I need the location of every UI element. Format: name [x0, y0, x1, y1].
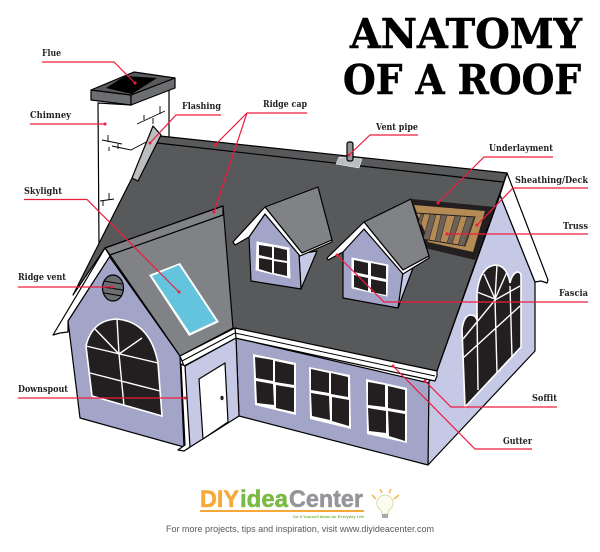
label: Flue [42, 49, 136, 84]
logo: idea [240, 486, 289, 513]
label: Soffit [424, 380, 558, 407]
front main wall [236, 338, 429, 465]
label: Gutter: Gutter [503, 437, 532, 447]
footer text: For more projects, tips and inspiration, visit www.diyideacenter.com [166, 524, 434, 535]
label: Ridge vent: Ridge vent [18, 273, 67, 283]
label: Ridge cap: Ridge cap [263, 100, 307, 110]
left bargeboard [53, 248, 110, 335]
roof opening: underlayment [412, 199, 495, 260]
label: Fascia [336, 254, 588, 302]
left gable wall [68, 256, 184, 447]
arched window right [462, 265, 521, 407]
logo: DIY [200, 486, 239, 513]
label: Chimney [30, 111, 106, 126]
label: Chimney: Chimney [30, 111, 72, 121]
label: Skylight: Skylight [24, 187, 63, 197]
main roof [73, 136, 507, 371]
label: Flashing: Flashing [182, 102, 222, 112]
sheathing deck [414, 205, 485, 252]
title: ANATOMY [349, 10, 583, 58]
truss [416, 213, 475, 246]
gutter [235, 328, 437, 381]
flashing [132, 126, 161, 181]
front entry wall [185, 338, 239, 449]
right bargeboard [500, 173, 548, 283]
door [199, 363, 228, 439]
entry gutter [180, 328, 236, 366]
label: Downspout: Downspout [18, 385, 69, 395]
vent pipe [336, 142, 362, 168]
logo [200, 486, 364, 519]
downspout [178, 364, 190, 451]
label: Vent pipe [348, 123, 418, 156]
chimney [91, 72, 175, 245]
label: Sheathing/Deck [476, 176, 589, 226]
label: Sheathing/Deck: Sheathing/Deck [515, 176, 589, 186]
label: Skylight [24, 187, 180, 294]
wall window 3 [366, 379, 407, 443]
wall window 1 [253, 354, 296, 415]
title: OF A ROOF [343, 56, 581, 104]
right side wall [428, 173, 548, 465]
label: Flashing [148, 102, 222, 144]
icon: light bulb [372, 489, 399, 518]
arched window left [86, 319, 162, 416]
label: Underlayment: Underlayment [489, 144, 554, 154]
label: Gutter [392, 364, 532, 449]
title [343, 10, 583, 104]
label: Downspout [18, 385, 186, 400]
label: Soffit: Soffit [532, 394, 558, 404]
label: Truss: Truss [563, 222, 588, 232]
skylight [149, 263, 219, 336]
wall window 2 [309, 367, 351, 429]
label: Fascia: Fascia [559, 289, 588, 299]
label: Flue: Flue [42, 49, 61, 59]
dormer right [327, 199, 429, 308]
front gable roof [105, 206, 233, 356]
logo: Center [289, 486, 363, 513]
dormer left [233, 187, 332, 289]
label: Ridge cap [212, 100, 307, 214]
label: Truss [446, 222, 588, 236]
ridge vent [102, 275, 124, 301]
logo: Do It Yourself Ideas for Everyday Life [293, 515, 364, 519]
label: Ridge vent [18, 273, 114, 288]
label: Underlayment [436, 144, 554, 204]
label: Vent pipe: Vent pipe [375, 123, 418, 133]
